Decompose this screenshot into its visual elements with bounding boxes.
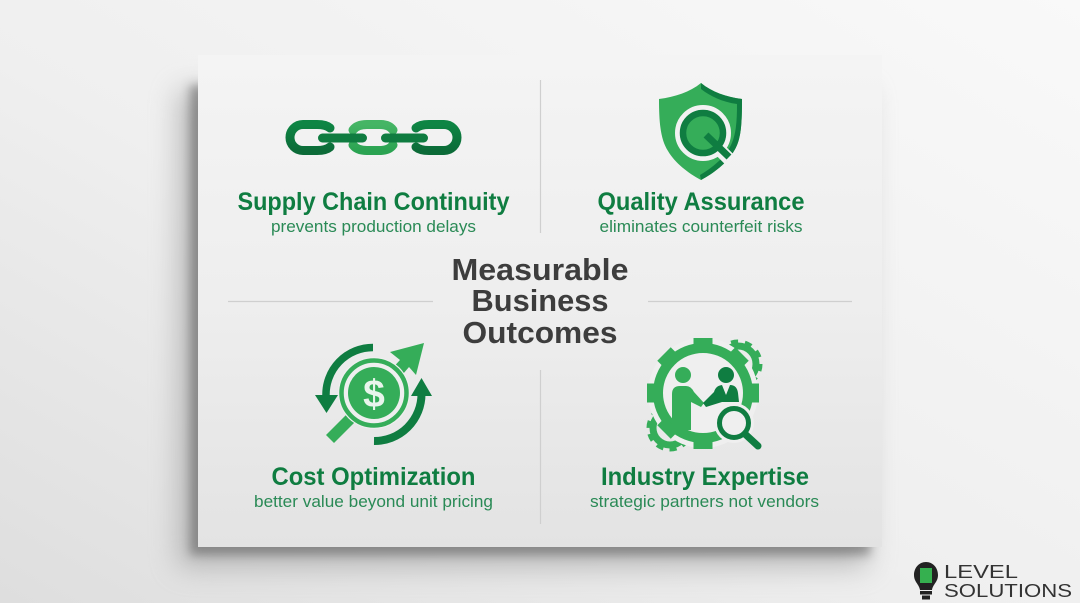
icon: shield with Q: [659, 83, 742, 180]
person right: [718, 367, 734, 383]
logo: Level Solutions: SOLUTIONS: [944, 580, 1072, 601]
heading: Supply Chain Continuity: Supply Chain Continuity: [238, 188, 510, 216]
heading: Industry Expertise: Industry Expertise: [601, 463, 809, 491]
icon: cost optimization: $: [363, 373, 385, 416]
text: better value beyond unit pricing: better value beyond unit pricing: [254, 493, 493, 511]
heading: Cost Optimization: Cost Optimization: [272, 463, 476, 491]
title: Business: [472, 283, 608, 318]
icon: industry expertise: [647, 338, 760, 449]
small gear: top right: [716, 342, 760, 386]
card shadow: [178, 85, 870, 567]
text: prevents production delays: prevents production delays: [271, 218, 476, 236]
main gear: [648, 338, 758, 448]
heading: Quality Assurance: Quality Assurance: [598, 188, 805, 216]
logo: Level Solutions: [914, 561, 1072, 601]
magnifier: [714, 403, 754, 443]
title: Measurable: [452, 252, 628, 287]
panel: card: [198, 55, 882, 547]
icon: cost optimization: [315, 343, 432, 443]
person left: [675, 367, 691, 383]
text: strategic partners not vendors: strategic partners not vendors: [590, 493, 819, 511]
dividers: [228, 80, 852, 524]
text: eliminates counterfeit risks: eliminates counterfeit risks: [600, 218, 802, 236]
icon: chain links: [290, 124, 457, 150]
title: [452, 252, 628, 350]
title: Outcomes: [462, 315, 618, 350]
logo: Level Solutions: LEVEL: [944, 561, 1018, 582]
small gear: bottom left: [649, 407, 691, 449]
